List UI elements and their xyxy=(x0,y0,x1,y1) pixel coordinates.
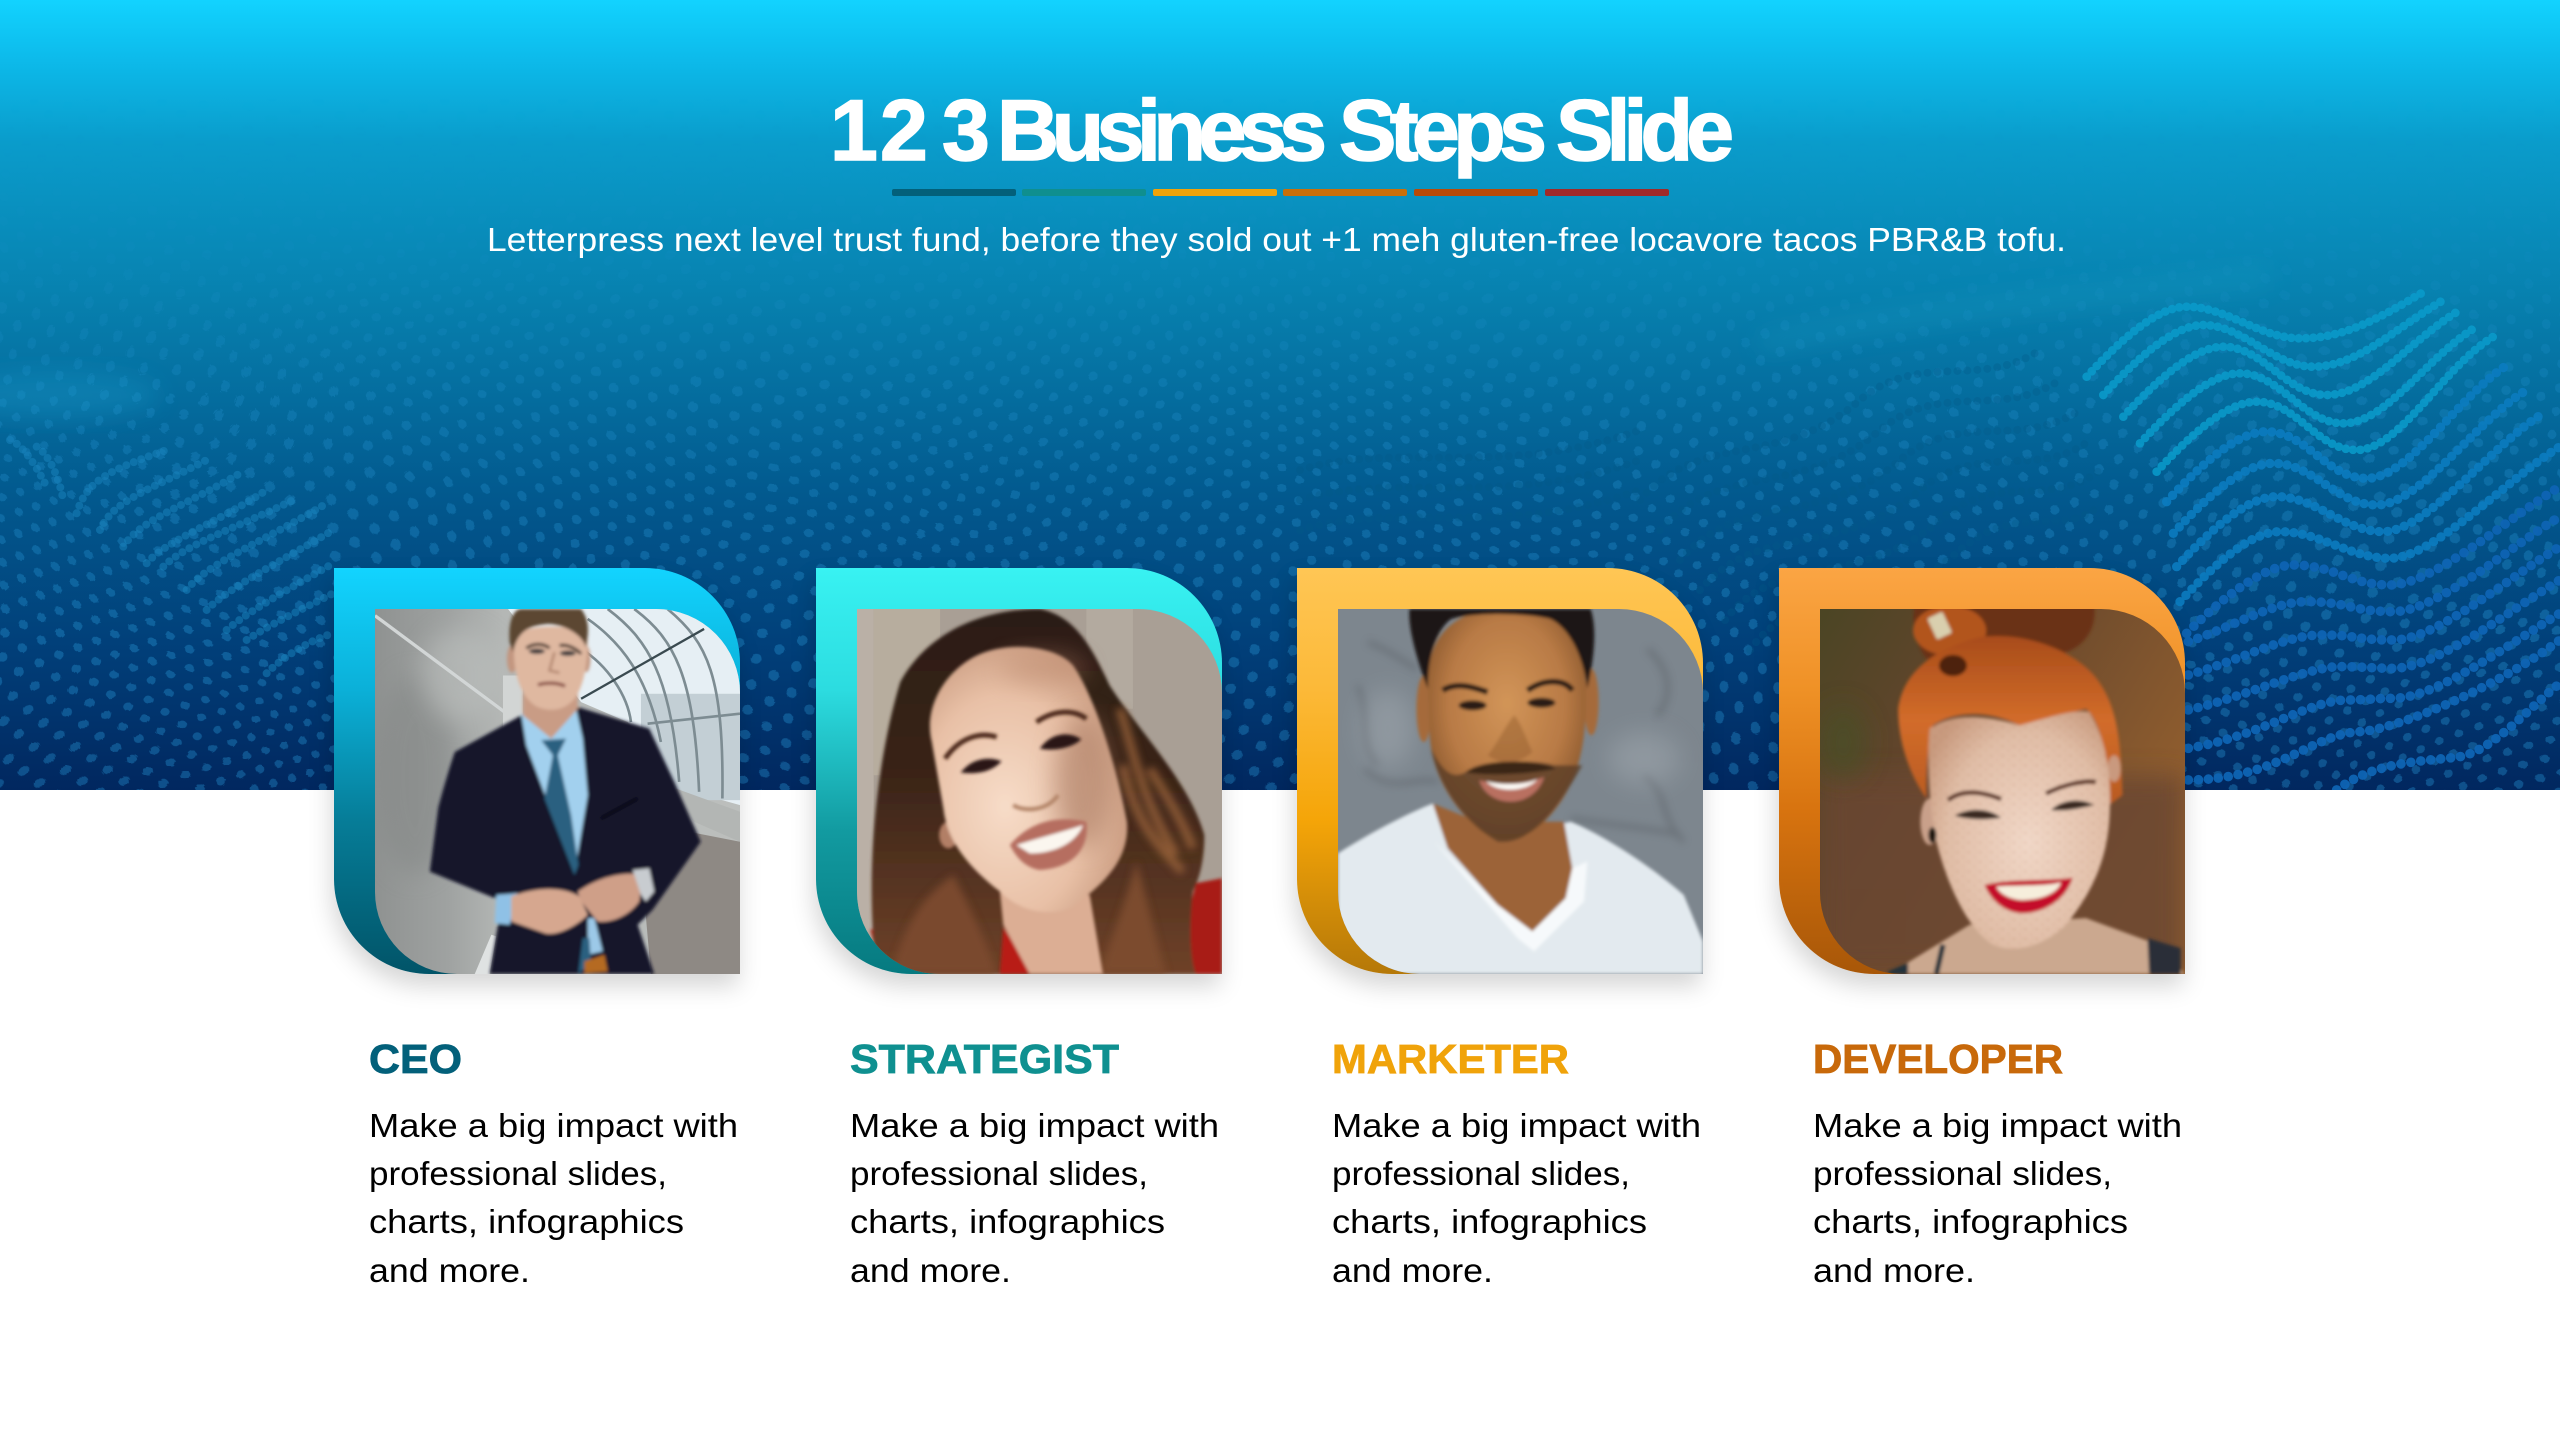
card: Marketer photo frame xyxy=(1297,568,1703,974)
role heading: CEO: CEO xyxy=(369,1036,462,1082)
role heading: Marketer: MARKETER xyxy=(1332,1036,1569,1082)
body text: CEO: and more. xyxy=(369,1252,530,1289)
title xyxy=(830,83,1734,179)
body text: Marketer xyxy=(1332,1107,1701,1289)
card: Developer photo frame xyxy=(1779,568,2185,974)
role heading: Developer: DEVELOPER xyxy=(1813,1036,2063,1082)
body text: Marketer: professional slides, xyxy=(1332,1155,1630,1192)
column: Strategist xyxy=(850,1036,1219,1289)
title: Business xyxy=(997,83,1327,179)
title: Steps xyxy=(1339,83,1547,179)
colored divider bars xyxy=(892,189,1669,196)
body text: Developer: and more. xyxy=(1813,1252,1975,1289)
body text: Strategist: and more. xyxy=(850,1252,1011,1289)
body text: Marketer: and more. xyxy=(1332,1252,1493,1289)
body text: Developer: charts, infographics xyxy=(1813,1203,2128,1240)
photo: red-haired freckled woman xyxy=(1820,609,2185,974)
photo: smiling woman with long brown hair xyxy=(857,609,1222,974)
header band: wave dot background xyxy=(0,0,2560,790)
card: CEO photo frame xyxy=(334,568,740,974)
body text: Marketer: Make a big impact with xyxy=(1332,1107,1701,1144)
column: Marketer xyxy=(1332,1036,1701,1289)
body text: Marketer: charts, infographics xyxy=(1332,1203,1647,1240)
title: Slide xyxy=(1556,83,1734,179)
subtitle: Letterpress next level trust fund, before they sold out +1 meh gluten-free locavore tacos PBR&B tofu. xyxy=(487,221,2066,258)
card: Strategist photo frame xyxy=(816,568,1222,974)
body text: Strategist: charts, infographics xyxy=(850,1203,1165,1240)
body text: CEO: charts, infographics xyxy=(369,1203,684,1240)
body text: Developer xyxy=(1813,1107,2182,1289)
body text: Developer: Make a big impact with xyxy=(1813,1107,2182,1144)
role heading: Strategist: STRATEGIST xyxy=(850,1036,1119,1082)
body text: Strategist xyxy=(850,1107,1219,1289)
body text: CEO xyxy=(369,1107,738,1289)
body text: CEO: professional slides, xyxy=(369,1155,667,1192)
body text: Strategist: Make a big impact with xyxy=(850,1107,1219,1144)
photo: smiling man in white t-shirt xyxy=(1338,609,1703,974)
title and subtitle block xyxy=(487,83,2066,258)
photo: man in navy suit xyxy=(375,609,740,974)
column: CEO xyxy=(369,1036,738,1289)
body text: CEO: Make a big impact with xyxy=(369,1107,738,1144)
body text: Developer: professional slides, xyxy=(1813,1155,2112,1192)
body text: Strategist: professional slides, xyxy=(850,1155,1148,1192)
title: 1 2 3 xyxy=(830,83,990,179)
column: Developer xyxy=(1813,1036,2182,1289)
